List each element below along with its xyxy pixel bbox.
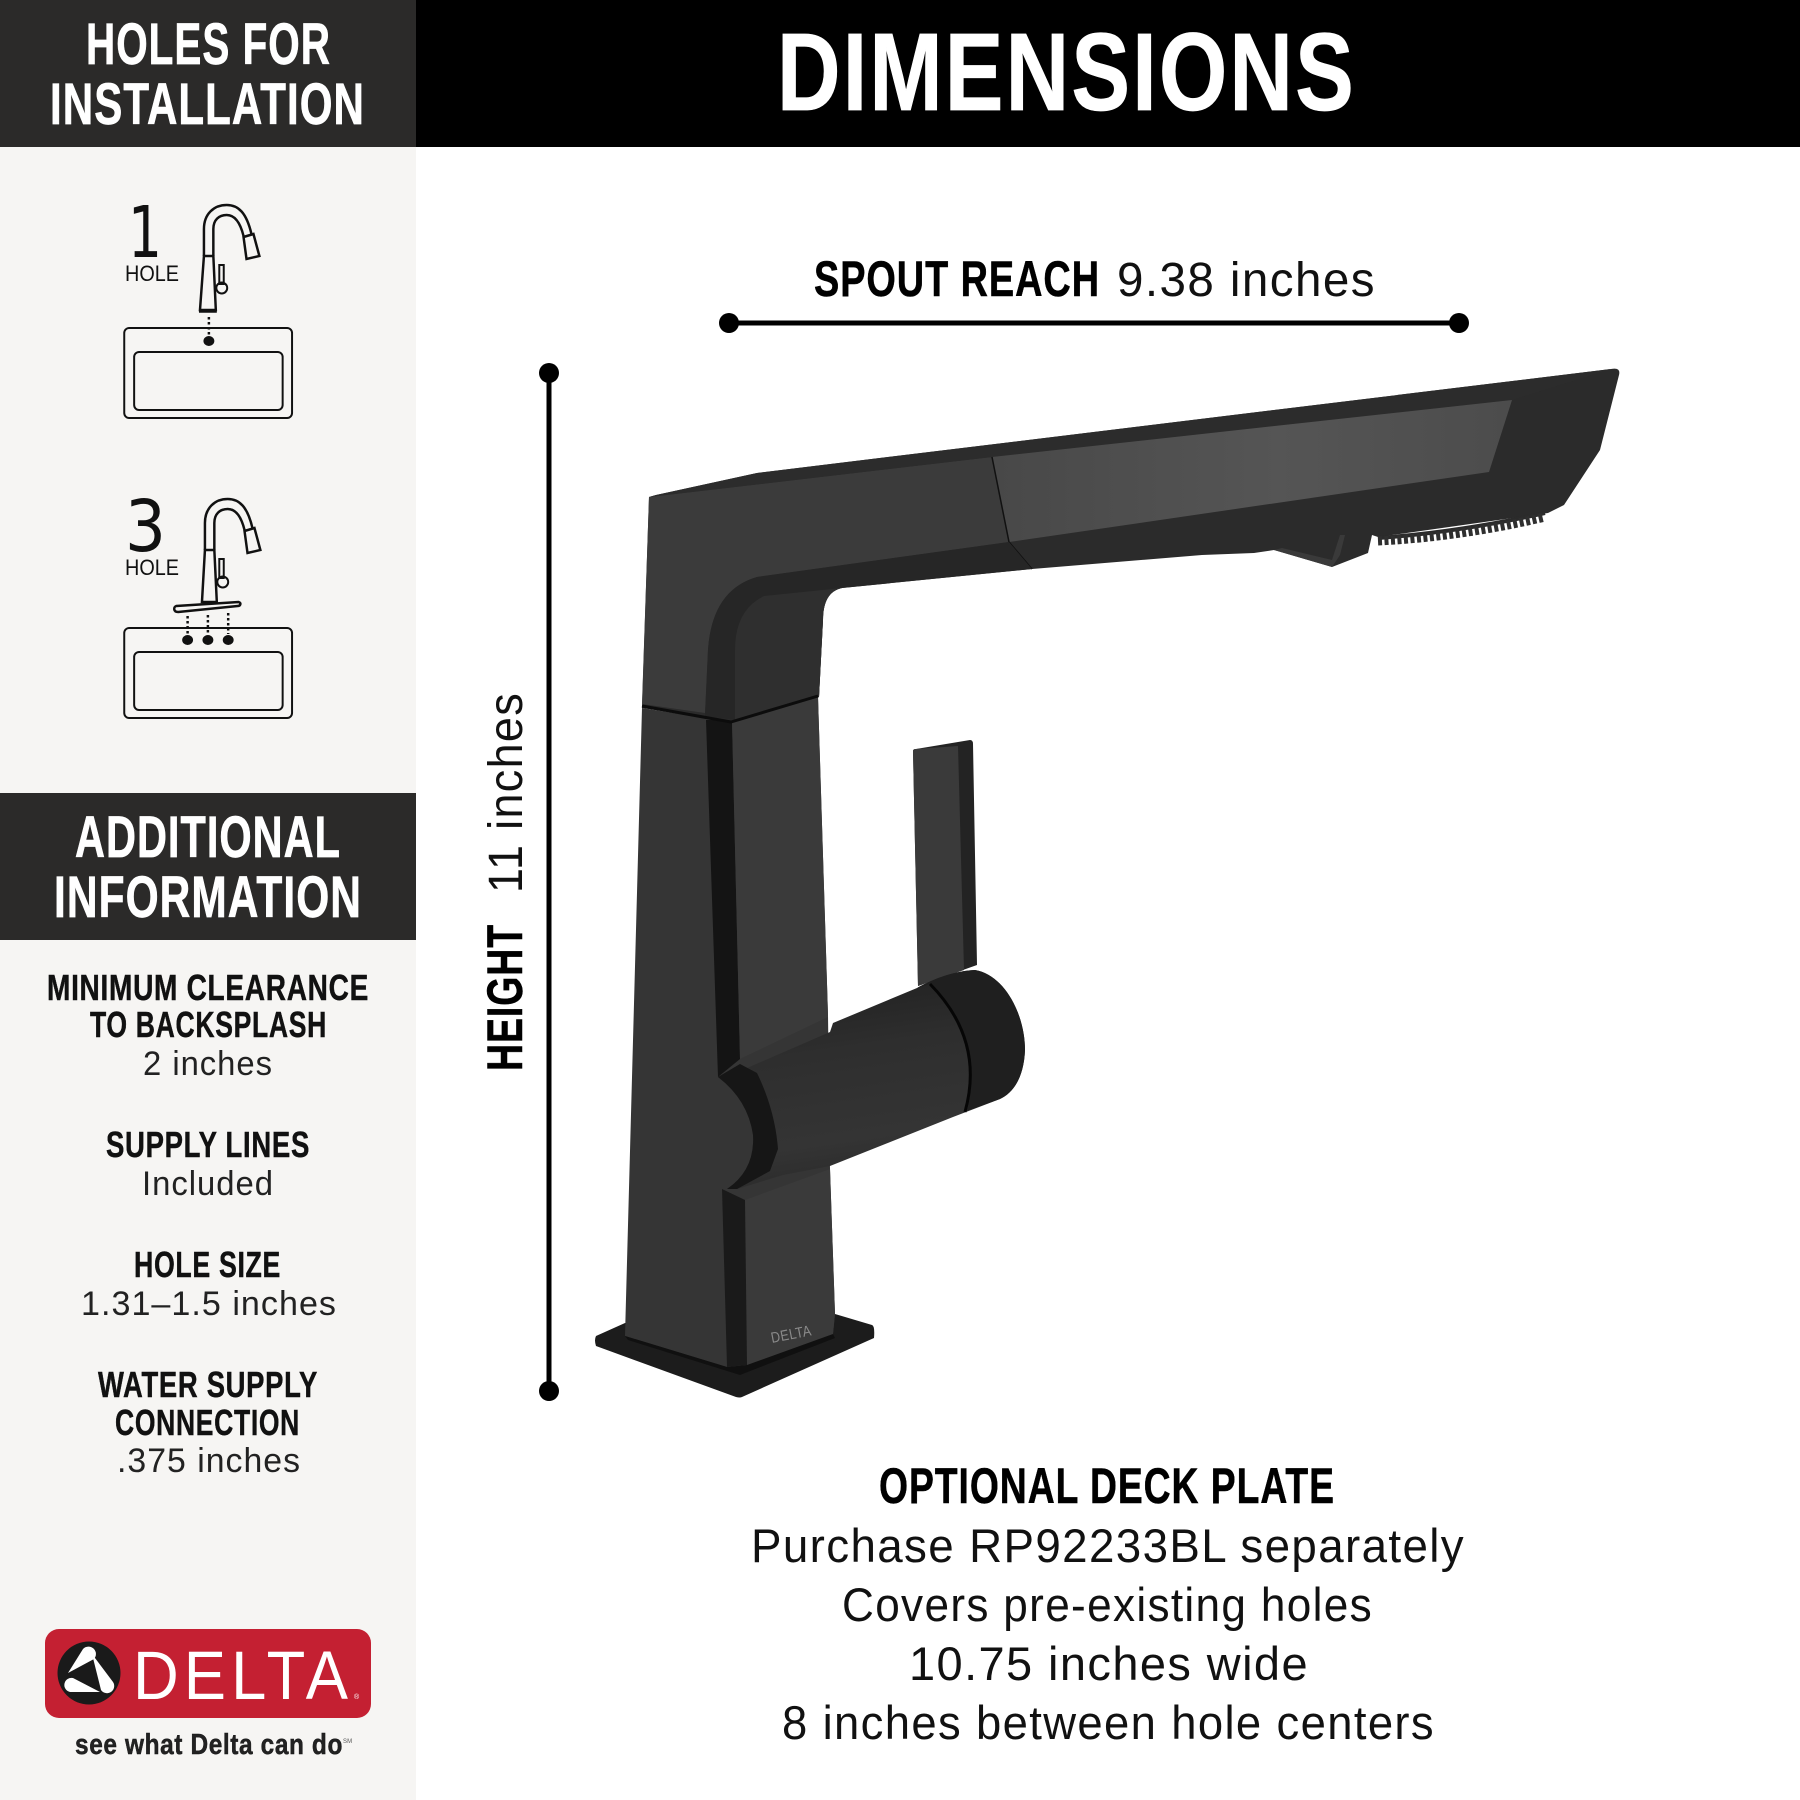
right upper face bbox=[732, 697, 828, 1059]
base plate bbox=[595, 1314, 874, 1398]
text block: water supply connection: CONNECTION bbox=[115, 1402, 300, 1443]
text block: hole size: 1.31–1.5 inches bbox=[81, 1285, 337, 1323]
icon: 1 hole installation: HOLE bbox=[125, 261, 179, 286]
dimension: spout reach: SPOUT REACH bbox=[814, 251, 1100, 307]
neck joint line bbox=[642, 696, 818, 722]
icon: 3 hole installation: 3 bbox=[125, 485, 166, 568]
logo: delta: DELTA bbox=[133, 1637, 353, 1714]
text block: supply lines: Included bbox=[142, 1165, 274, 1203]
text block: water supply connection: .375 inches bbox=[117, 1442, 301, 1480]
text block: optional deck plate: 8 inches between hole centers bbox=[782, 1696, 1435, 1749]
heading: additional information bbox=[0, 793, 416, 940]
spout window panel bbox=[992, 400, 1512, 542]
lower body bbox=[625, 697, 835, 1367]
cylinder end cap bbox=[917, 970, 1025, 1111]
nozzle bbox=[1378, 513, 1545, 538]
text block: minimum clearance: 2 inches bbox=[143, 1045, 273, 1083]
title: dimensions bbox=[416, 0, 1800, 147]
spout and neck silhouette bbox=[642, 369, 1619, 722]
icon: 1 hole installation: 1 bbox=[128, 191, 162, 274]
neck inner strip bbox=[705, 542, 1032, 720]
text block: optional deck plate bbox=[751, 1458, 1465, 1749]
text block: hole size: HOLE SIZE bbox=[134, 1244, 281, 1285]
text block: minimum clearance bbox=[47, 967, 369, 1083]
text block: optional deck plate: Covers pre-existing holes bbox=[842, 1578, 1373, 1631]
dimension: spout reach bbox=[719, 251, 1469, 333]
heading: holes for installation: INSTALLATION bbox=[50, 72, 365, 137]
lower front face bbox=[722, 1169, 835, 1367]
logo: delta: ® bbox=[354, 1693, 360, 1701]
spout top strip bbox=[649, 369, 1611, 497]
text block: water supply connection: WATER SUPPLY bbox=[98, 1364, 318, 1405]
text block: supply lines bbox=[106, 1124, 310, 1203]
dark corner strip bbox=[706, 720, 740, 1077]
text block: supply lines: SUPPLY LINES bbox=[106, 1124, 310, 1165]
logo: delta bbox=[45, 1629, 371, 1761]
dimension: height bbox=[477, 363, 559, 1401]
spout left face bbox=[642, 457, 1009, 713]
heading: holes for installation: HOLES FOR bbox=[86, 12, 331, 77]
text block: minimum clearance: MINIMUM CLEARANCE bbox=[47, 967, 369, 1008]
heading: additional information: INFORMATION bbox=[54, 865, 362, 930]
dimension: height: HEIGHT bbox=[477, 924, 533, 1071]
icon: 3 hole installation bbox=[124, 485, 292, 718]
title: dimensions: DIMENSIONS bbox=[777, 11, 1356, 134]
icon: 3 hole installation: HOLE bbox=[125, 555, 179, 580]
text block: minimum clearance: TO BACKSPLASH bbox=[90, 1004, 327, 1045]
logo: delta: see what Delta can do bbox=[75, 1729, 343, 1761]
text block: hole size bbox=[81, 1244, 337, 1323]
dimension: spout reach: 9.38 inches bbox=[1117, 254, 1376, 307]
dimension: height: 11 inches bbox=[480, 692, 533, 893]
text block: optional deck plate: Purchase RP92233BL separately bbox=[751, 1519, 1465, 1572]
lever handle bbox=[913, 740, 977, 986]
text block: optional deck plate: 10.75 inches wide bbox=[909, 1637, 1309, 1690]
text block: water supply connection bbox=[98, 1364, 318, 1480]
text block: optional deck plate: OPTIONAL DECK PLATE bbox=[879, 1458, 1335, 1514]
icon: 1 hole installation bbox=[124, 191, 292, 418]
logo: delta: SM bbox=[343, 1739, 352, 1745]
heading: additional information: ADDITIONAL bbox=[75, 805, 341, 870]
faucet logo mark: DELTA bbox=[770, 1322, 813, 1347]
panel: left sidebar bbox=[0, 0, 416, 1800]
heading: holes for installation bbox=[0, 0, 416, 147]
cylinder bbox=[718, 970, 1025, 1189]
image: black pull-down faucet bbox=[595, 369, 1619, 1398]
